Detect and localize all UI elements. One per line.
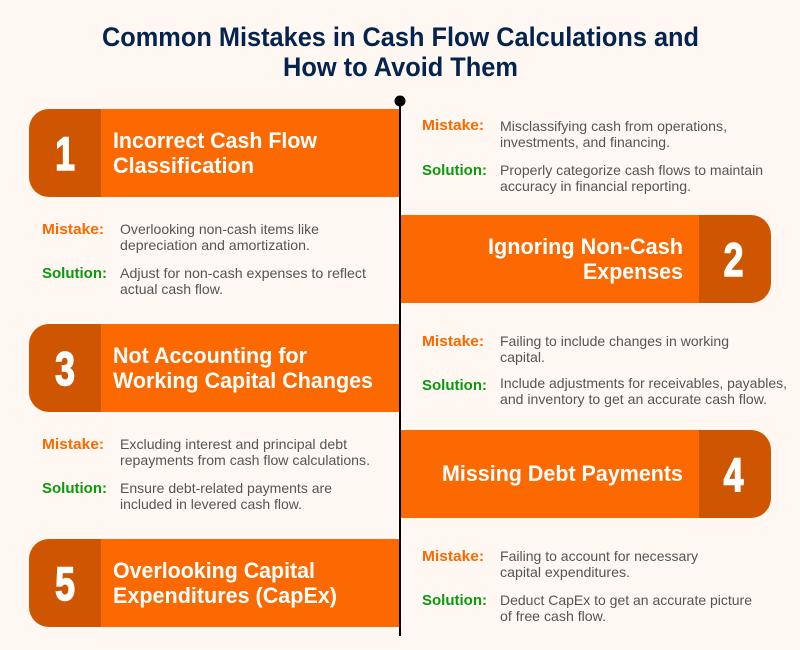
panel: mistake 2 banner: Ignoring Non-Cash — [488, 234, 683, 259]
text block: mistake 3 details: capital. — [500, 350, 545, 365]
text block: mistake 5 details — [422, 548, 752, 624]
text block: mistake 1 right column details: accuracy in financial reporting. — [500, 179, 691, 194]
text block: mistake 1 details: Overlooking non-cash items like — [120, 222, 319, 237]
panel: mistake 5 banner — [29, 539, 399, 627]
title: How to Avoid Them — [283, 52, 518, 82]
text block: mistake 1 right column details: investments, and financing. — [500, 135, 670, 150]
text block: mistake 1 right column details: Solution: — [422, 162, 487, 179]
text block: mistake 3 details: Failing to include changes in working — [500, 334, 729, 349]
text block: mistake 5 details: Mistake: — [422, 548, 484, 565]
panel: mistake 3 banner: Not Accounting for — [113, 343, 307, 368]
text block: mistake 1 details: Solution: — [42, 265, 107, 282]
panel: mistake 2 banner: 2 — [724, 233, 743, 286]
panel: mistake 5 banner: Expenditures (CapEx) — [113, 583, 337, 608]
panel: mistake 3 banner — [29, 324, 399, 412]
text block: mistake 5 details: Deduct CapEx to get an accurate picture — [500, 593, 752, 608]
text block: mistake 1 details: Mistake: — [42, 221, 104, 238]
text block: mistake 3 details: Include adjustments for receivables, payables, — [500, 376, 787, 391]
text block: mistake 3 details: Mistake: — [422, 333, 484, 350]
text block: mistake 4 details — [42, 436, 370, 512]
text block: mistake 4 details: repayments from cash flow calculations. — [120, 453, 370, 468]
text block: mistake 1 details: depreciation and amortization. — [120, 238, 310, 253]
panel: mistake 4 banner — [401, 430, 771, 518]
central timeline with dot — [394, 96, 406, 636]
panel: mistake 3 banner: Working Capital Changes — [113, 368, 373, 393]
text block: mistake 1 details — [42, 221, 366, 297]
title: Common Mistakes in Cash Flow Calculations and — [102, 22, 699, 52]
text block: mistake 3 details — [422, 333, 787, 407]
text block: mistake 5 details: capital expenditures. — [500, 565, 630, 580]
panel: mistake 4 banner: Missing Debt Payments — [442, 461, 683, 486]
title — [102, 22, 699, 82]
panel: mistake 2 banner — [401, 215, 771, 303]
text block: mistake 4 details: Solution: — [42, 480, 107, 497]
panel: mistake 1 banner: Incorrect Cash Flow — [113, 128, 317, 153]
panel: mistake 1 banner: Classification — [113, 153, 254, 178]
text block: mistake 4 details: Excluding interest and principal debt — [120, 437, 347, 452]
text block: mistake 1 right column details: Misclassifying cash from operations, — [500, 119, 727, 134]
panel: mistake 1 banner: 1 — [55, 127, 75, 180]
text block: mistake 3 details: Solution: — [422, 377, 487, 394]
text block: mistake 4 details: Mistake: — [42, 436, 104, 453]
text block: mistake 1 details: Adjust for non-cash expenses to reflect — [120, 266, 366, 281]
text block: mistake 1 details: actual cash flow. — [120, 282, 223, 297]
text block: mistake 5 details: Failing to account for necessary — [500, 549, 698, 564]
text block: mistake 3 details: and inventory to get an accurate cash flow. — [500, 392, 767, 407]
panel: mistake 2 banner: Expenses — [583, 259, 683, 284]
panel: mistake 1 banner — [29, 109, 399, 197]
panel: mistake 5 banner: Overlooking Capital — [113, 558, 315, 583]
text block: mistake 1 right column details: Properly categorize cash flows to maintain — [500, 163, 763, 178]
panel: mistake 5 banner: 5 — [55, 557, 75, 610]
text block: mistake 1 right column details: Mistake: — [422, 117, 484, 134]
text block: mistake 1 right column details — [422, 117, 763, 194]
text block: mistake 4 details: Ensure debt-related payments are — [120, 481, 332, 496]
text block: mistake 5 details: Solution: — [422, 592, 487, 609]
panel: mistake 3 banner: 3 — [55, 342, 75, 395]
panel: mistake 4 banner: 4 — [724, 448, 743, 501]
text block: mistake 4 details: included in levered cash flow. — [120, 497, 302, 512]
text block: mistake 5 details: of free cash flow. — [500, 609, 606, 624]
